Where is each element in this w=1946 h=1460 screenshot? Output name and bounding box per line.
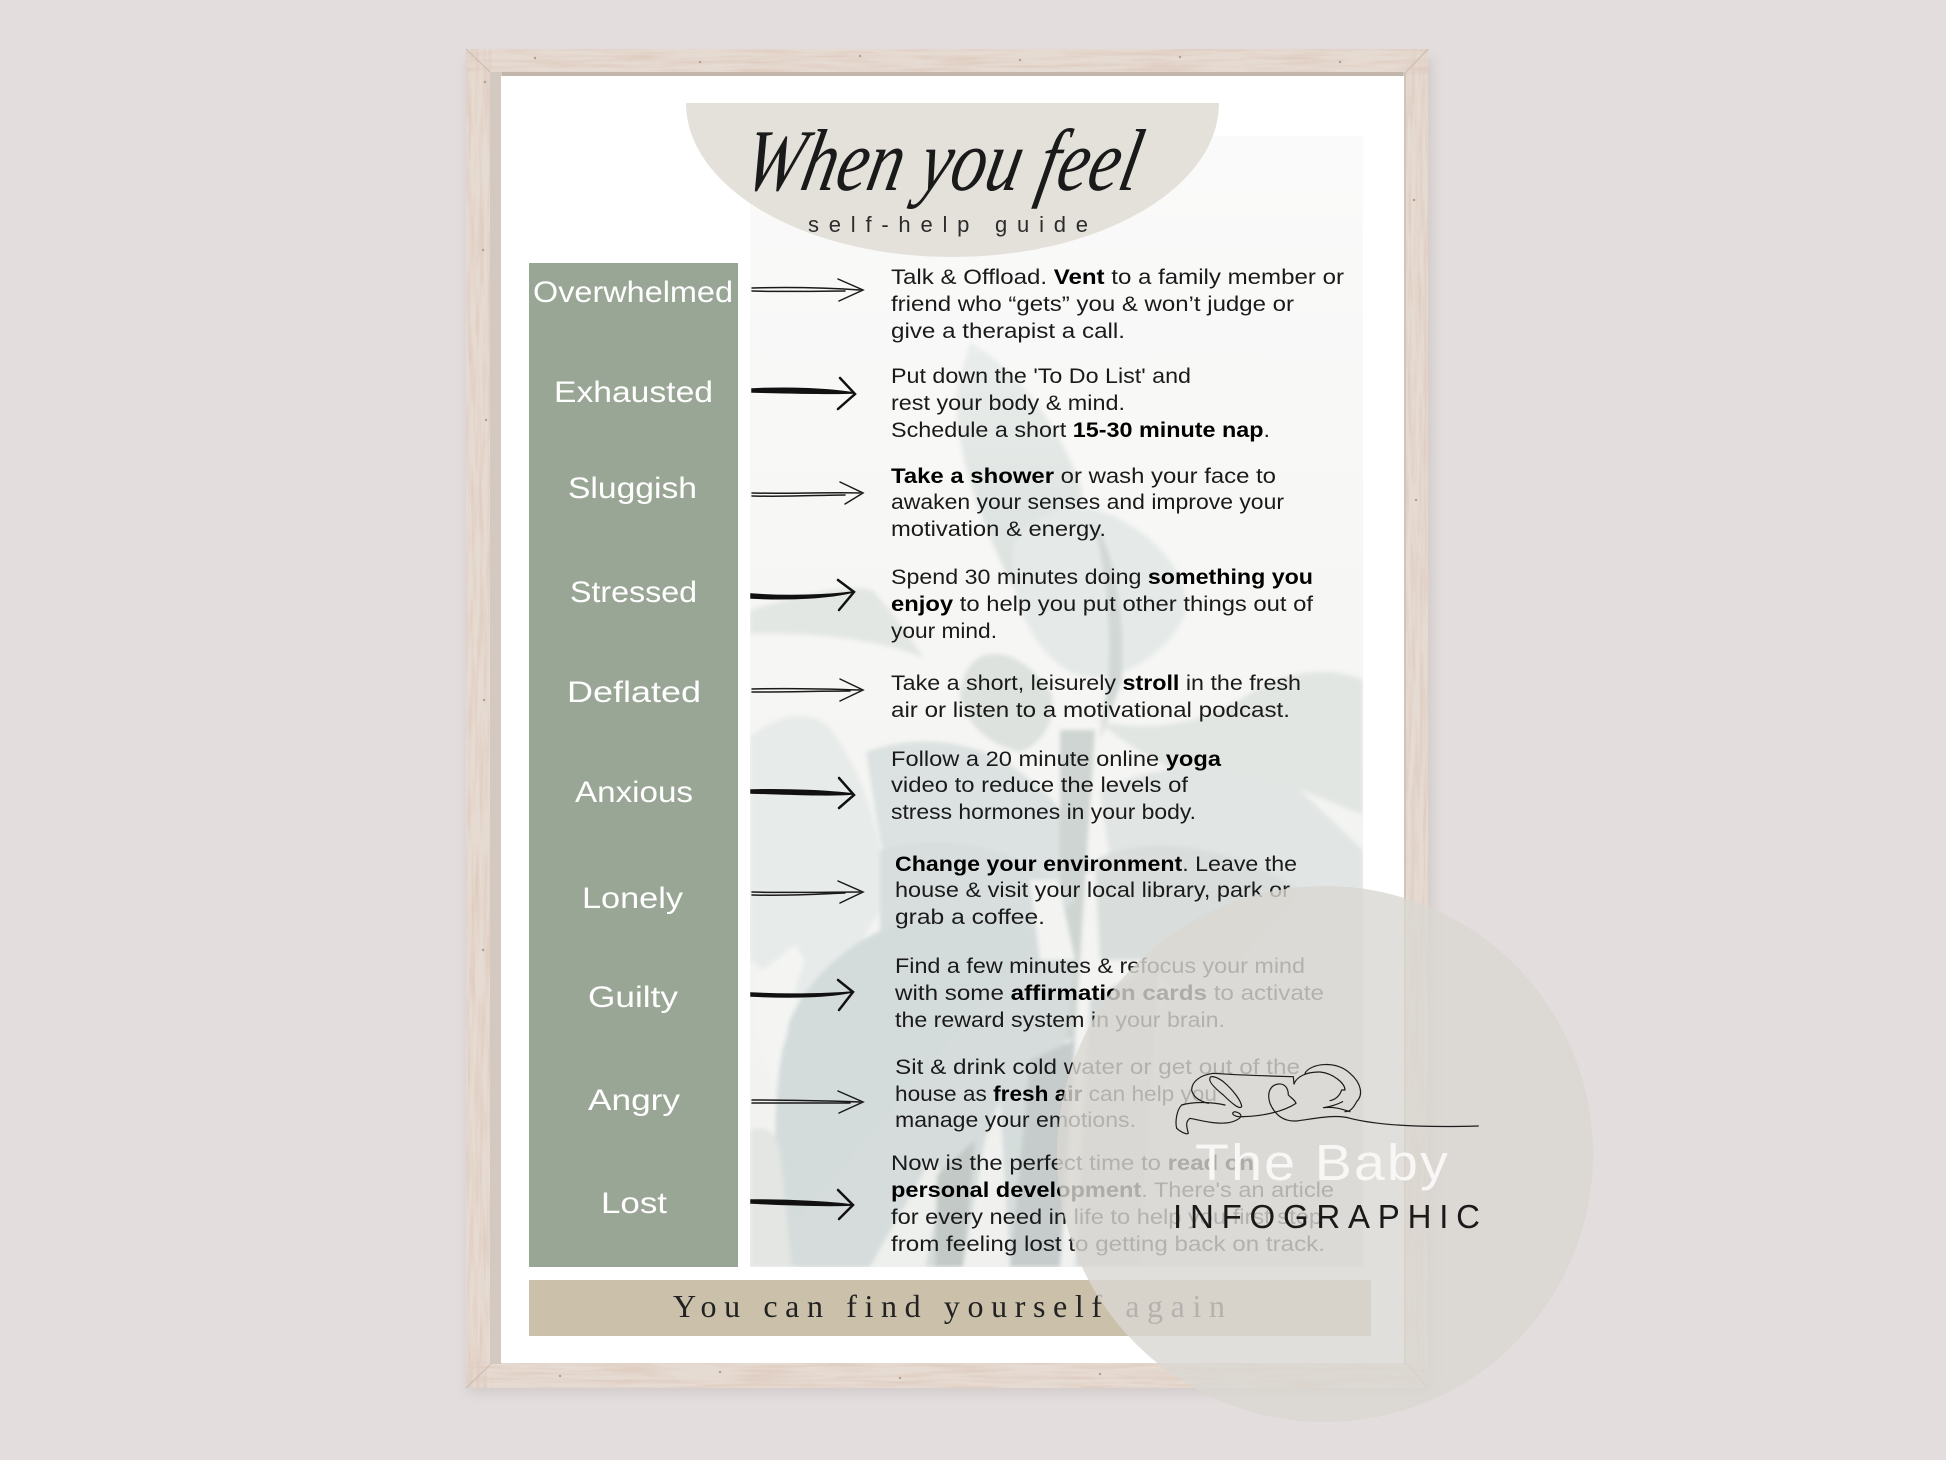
arrow: Guilty	[751, 980, 853, 1010]
white streak	[870, 1160, 945, 1267]
advice: Sluggish: Take a shower or wash your face to	[891, 464, 1276, 488]
white wedge	[766, 948, 804, 1040]
label: Exhausted: Exhausted	[554, 376, 713, 409]
white wedge top	[1030, 880, 1075, 960]
advice: Guilty: the reward system in your brain.	[895, 1008, 1225, 1032]
advice: Angry	[895, 1055, 1300, 1132]
grey stem bottom	[935, 1140, 975, 1267]
label: Lost: Lost	[601, 1187, 668, 1220]
leaf: mid band	[879, 850, 1072, 930]
leaf: lower left big	[750, 716, 886, 1000]
advice: Lost: personal development . There's an article	[891, 1178, 1334, 1202]
advice: Overwhelmed: Talk & Offload. Vent to a family member or	[891, 265, 1344, 289]
advice: Anxious: Follow a 20 minute online yoga	[891, 747, 1222, 771]
label: Guilty: Guilty	[588, 981, 678, 1014]
leaf: bottom left	[750, 1128, 792, 1267]
watermark: The Baby: The Baby	[1195, 1134, 1450, 1191]
label: Angry: Angry	[588, 1084, 680, 1117]
advice: Angry: manage your emotions.	[895, 1108, 1136, 1132]
advice: Lonely: house & visit your local library, park or	[895, 878, 1290, 902]
advice: Anxious: stress hormones in your body.	[891, 800, 1196, 824]
footer text: You can find yourself again	[673, 1288, 1225, 1324]
arrow: Exhausted	[752, 378, 855, 409]
leaf: upper-right mid	[1094, 854, 1146, 961]
wooden picture frame	[466, 49, 1428, 1388]
advice: Angry: house as fresh air can help you	[895, 1082, 1217, 1106]
panel: feelings column	[529, 263, 738, 1267]
arrow: Sluggish	[752, 482, 863, 504]
advice: Overwhelmed: friend who “gets” you & won’t judge or	[891, 292, 1294, 316]
arrow: Deflated	[752, 679, 863, 701]
plant photo panel	[750, 338, 1363, 1267]
right leaf lower	[1140, 1000, 1363, 1267]
title: When you feel: When you feel	[736, 113, 1151, 210]
advice: Overwhelmed: give a therapist a call.	[891, 319, 1125, 343]
arrow: Lonely	[752, 881, 863, 903]
white streak right	[963, 1100, 1010, 1267]
label: Anxious: Anxious	[575, 776, 693, 809]
advice: Lost	[891, 1151, 1334, 1256]
advice: Exhausted: Put down the 'To Do List' and	[891, 364, 1191, 388]
white wedge right	[1306, 794, 1363, 847]
advice: Stressed: enjoy to help you put other things out of	[891, 592, 1313, 616]
icon: sleeping baby line drawing	[1176, 1065, 1478, 1134]
leaf: left upper	[750, 588, 924, 658]
label: Deflated: Deflated	[567, 676, 701, 709]
advice: Guilty: with some affirmation cards to activate	[894, 981, 1324, 1005]
arrow: Overwhelmed	[752, 279, 863, 301]
leaf: right lower	[1100, 770, 1363, 888]
stem centre	[1058, 728, 1096, 1042]
arrow: Anxious	[751, 778, 854, 808]
label: Sluggish: Sluggish	[568, 472, 697, 505]
right stem lower	[1074, 982, 1119, 1267]
leaf: lower centre	[866, 740, 1093, 882]
leaf: right	[1096, 672, 1363, 860]
advice: Lonely: Change your environment . Leave the	[895, 852, 1297, 876]
arrow: Lost	[751, 1190, 853, 1219]
advice: Lost: Now is the perfect time to read on	[891, 1151, 1254, 1175]
advice: Lost: from feeling lost to getting back on track.	[891, 1232, 1325, 1256]
advice: Lost: for every need in life to help you first step	[891, 1205, 1322, 1229]
advice: Deflated: Take a short, leisurely stroll in the fresh	[891, 671, 1301, 695]
footer banner	[529, 1280, 1371, 1336]
label: Overwhelmed: Overwhelmed	[533, 276, 733, 309]
advice: Angry: Sit & drink cold water or get out of the	[895, 1055, 1300, 1079]
stem upper	[1092, 520, 1123, 740]
advice: Lonely	[895, 852, 1297, 929]
watermark: INFOGRAPHIC: INFOGRAPHIC	[1173, 1198, 1480, 1235]
frame shadow	[468, 58, 1432, 1392]
label: Stressed: Stressed	[570, 576, 697, 609]
leaf: top centre	[957, 342, 1082, 600]
advice: Guilty	[894, 954, 1324, 1032]
advice: Exhausted	[891, 364, 1270, 442]
label: Lonely: Lonely	[582, 882, 683, 915]
advice: Anxious	[891, 747, 1222, 824]
poster paper	[501, 76, 1404, 1363]
watermark circle	[1057, 886, 1593, 1422]
advice: Guilty: Find a few minutes & refocus your mind	[895, 954, 1305, 978]
arrow: Stressed	[751, 580, 854, 610]
advice: Stressed: your mind.	[891, 619, 997, 643]
leaf: pale centre	[1012, 508, 1186, 677]
leaf: small centre	[960, 654, 1053, 752]
advice: Sluggish: motivation & energy.	[891, 517, 1106, 541]
advice: Exhausted: Schedule a short 15-30 minute nap .	[891, 418, 1270, 442]
advice: Anxious: video to reduce the levels of	[891, 773, 1188, 797]
advice: Overwhelmed	[891, 265, 1344, 343]
advice: Stressed	[891, 565, 1313, 643]
advice: Sluggish	[891, 464, 1284, 541]
advice: Deflated	[891, 671, 1301, 722]
advice: Sluggish: awaken your senses and improve your	[891, 490, 1284, 514]
title semi-circle	[686, 103, 1219, 257]
advice: Deflated: air or listen to a motivational podcast.	[891, 698, 1290, 722]
grey stem right	[1010, 1040, 1075, 1267]
advice: Lonely: grab a coffee.	[895, 905, 1045, 929]
advice: Stressed: Spend 30 minutes doing something you	[891, 565, 1313, 589]
arrow: Angry	[752, 1091, 863, 1113]
leaf: main lower	[775, 917, 1075, 1267]
advice: Exhausted: rest your body & mind.	[891, 391, 1125, 415]
subtitle: self-help guide: self-help guide	[808, 212, 1088, 237]
